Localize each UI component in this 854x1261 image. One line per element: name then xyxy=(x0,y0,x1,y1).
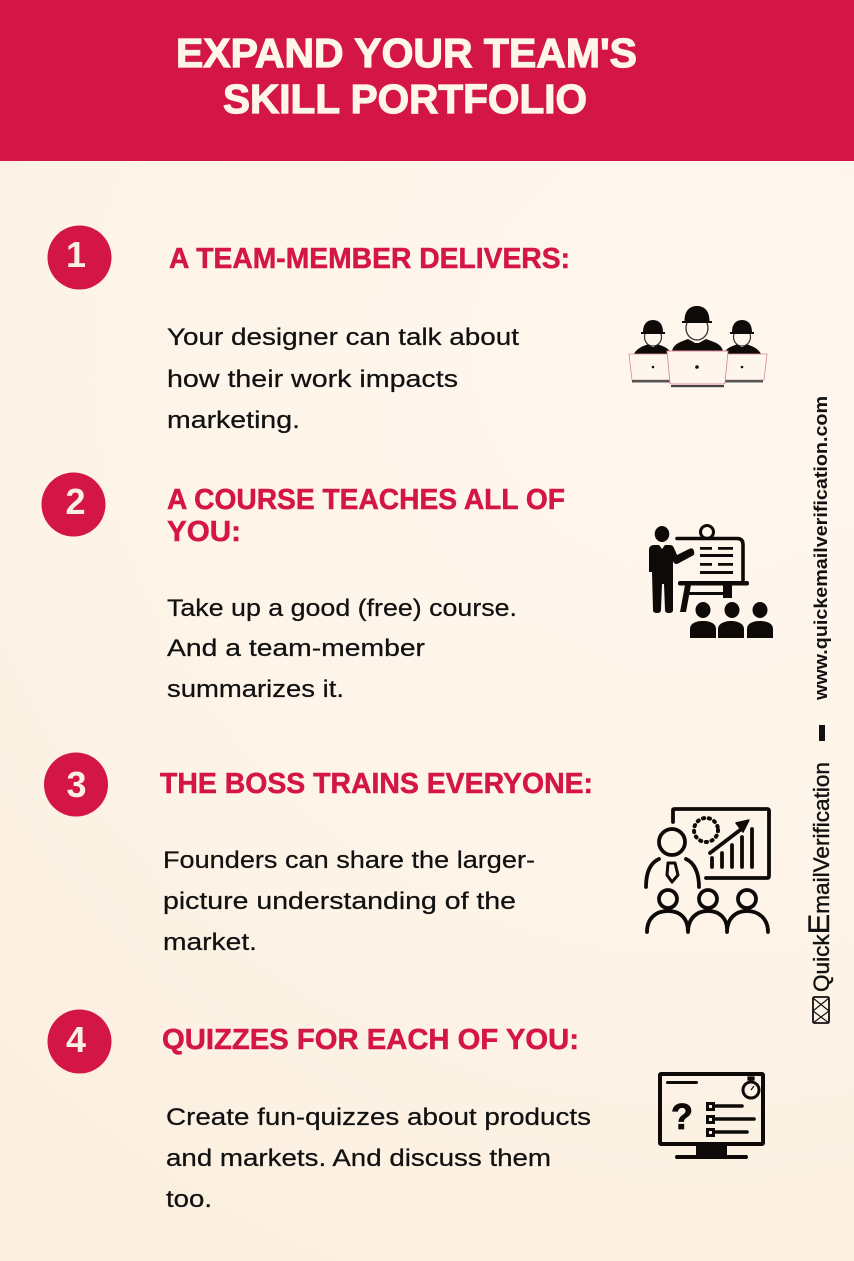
panel: step 1 xyxy=(48,226,767,434)
title: EXPAND YOUR TEAM'S xyxy=(176,30,637,76)
text block 2: Take up a good (free) course. xyxy=(167,595,517,622)
text block 2: And a team-member xyxy=(167,635,425,662)
divider dash xyxy=(819,725,825,741)
text block 4: and markets. And discuss them xyxy=(166,1145,551,1172)
heading 2 xyxy=(167,484,565,548)
text block 4 xyxy=(166,1104,591,1213)
text block 1: Your designer can talk about xyxy=(167,324,519,351)
text block 3: picture understanding of the xyxy=(163,888,516,915)
number badge 4: 4 xyxy=(66,1019,86,1060)
heading 2: A COURSE TEACHES ALL OF xyxy=(167,484,565,516)
icon: quiz on monitor: ? xyxy=(671,1096,693,1137)
panel: step 2 xyxy=(42,472,773,703)
heading 4: QUIZZES FOR EACH OF YOU: xyxy=(162,1024,579,1056)
text block 3 xyxy=(163,847,535,956)
title xyxy=(176,30,637,122)
header banner xyxy=(0,0,854,161)
text block 2: summarizes it. xyxy=(167,676,344,703)
number badge 1 xyxy=(48,226,112,290)
brand vertical text: QuickEmailVerification xyxy=(803,762,836,992)
number badge 1: 1 xyxy=(66,234,86,275)
number badge 2: 2 xyxy=(65,481,86,522)
text block 2 xyxy=(167,595,517,703)
heading 1: A TEAM-MEMBER DELIVERS: xyxy=(169,243,570,275)
icon: team members with helmets and laptops xyxy=(629,306,767,387)
icon: mail envelope logo xyxy=(813,997,829,1023)
text block 1 xyxy=(167,324,519,434)
icon: presenter at board with audience xyxy=(649,526,773,638)
heading 3: THE BOSS TRAINS EVERYONE: xyxy=(160,768,593,800)
panel: step 4 xyxy=(48,1010,763,1213)
text block 4: Create fun-quizzes about products xyxy=(166,1104,591,1131)
heading 2: YOU: xyxy=(167,516,241,548)
text block 3: market. xyxy=(163,929,257,956)
text block 1: marketing. xyxy=(167,407,300,434)
icon: boss presenting chart to team xyxy=(646,809,769,932)
text block 4: too. xyxy=(166,1186,212,1213)
number badge 2 xyxy=(42,472,106,536)
number badge 3: 3 xyxy=(66,764,87,805)
text block 1: how their work impacts xyxy=(167,366,458,393)
panel: step 3 xyxy=(44,752,769,956)
title: SKILL PORTFOLIO xyxy=(223,76,587,122)
number badge 4 xyxy=(48,1010,112,1074)
number badge 3 xyxy=(44,752,108,816)
icon: quiz on monitor xyxy=(660,1074,763,1159)
text block 3: Founders can share the larger- xyxy=(163,847,535,874)
website vertical text: www.quickemailverification.com xyxy=(811,396,831,701)
